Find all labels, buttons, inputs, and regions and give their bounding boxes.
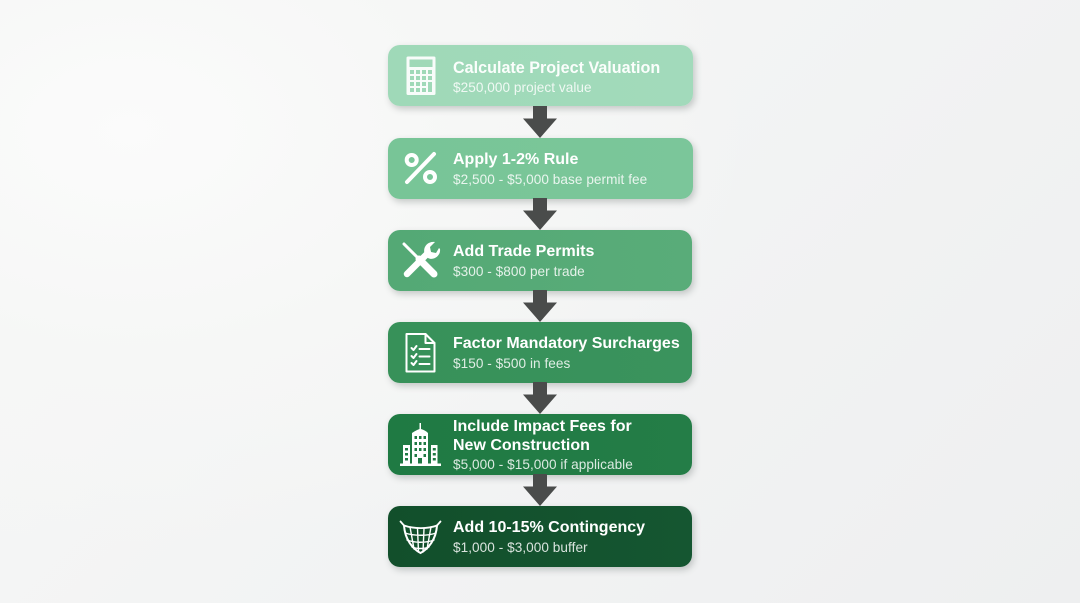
heading: step 1: Calculate Project Valuation (453, 58, 660, 76)
icon: safety net (400, 520, 442, 554)
panel: flow step 5, impact fees (388, 414, 692, 475)
icon: percent (404, 152, 437, 184)
heading: step 6: Add 10-15% Contingency (453, 519, 645, 536)
icon: wrench and screwdriver (402, 242, 440, 278)
arrow: step 1 to 2 (523, 106, 557, 138)
text: step 3 value: $300 - $800 per trade (453, 264, 585, 278)
heading: step 5 (453, 418, 632, 454)
arrow: step 2 to 3 (523, 198, 557, 230)
panel: flow step 4, surcharges (388, 322, 692, 383)
arrow: step 5 to 6 (523, 474, 557, 506)
arrow: step 4 to 5 (523, 382, 557, 414)
heading: step 4: Factor Mandatory Surcharges (453, 334, 680, 352)
panel: flow step 2, apply rule (388, 138, 692, 198)
panel: flow step 1, calculate project valuation (388, 45, 692, 106)
text: step 4 value: $150 - $500 in fees (453, 356, 570, 370)
heading: step 3: Add Trade Permits (453, 242, 594, 260)
text: step 1 value: $250,000 project value (453, 80, 592, 94)
icon: checklist document (406, 333, 436, 372)
text: step 6 value: $1,000 - $3,000 buffer (453, 540, 588, 554)
heading: step 2: Apply 1-2% Rule (453, 150, 578, 168)
text: step 5 value: $5,000 - $15,000 if applicable (453, 456, 633, 472)
heading: step 5: New Construction (453, 436, 590, 454)
heading: step 5: Include Impact Fees for (453, 418, 632, 435)
icon: city buildings (400, 423, 441, 466)
panel: flow step 6, contingency (388, 506, 692, 567)
arrow: step 3 to 4 (523, 290, 557, 322)
text: step 2 value: $2,500 - $5,000 base permit fee (453, 172, 647, 186)
panel: flow step 3, trade permits (388, 230, 692, 291)
icon: calculator (406, 56, 436, 95)
